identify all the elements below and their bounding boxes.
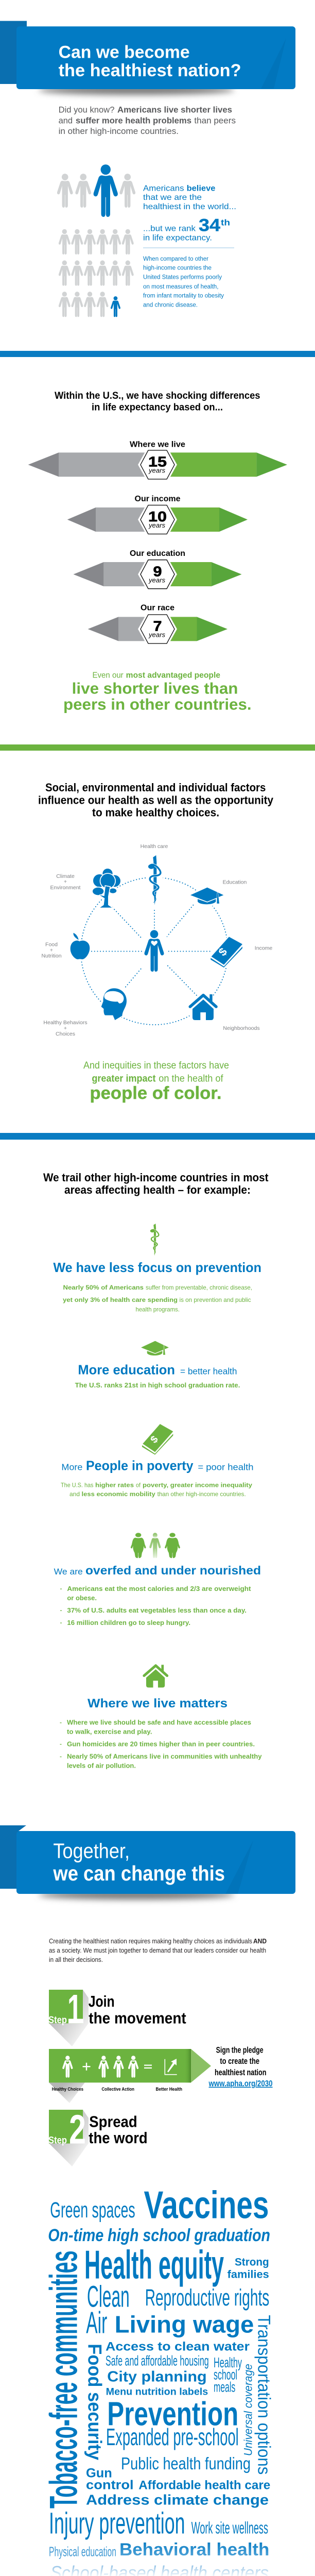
text: belief vs rank: and chronic disease. [143, 302, 198, 308]
heading [55, 390, 260, 413]
banner title: Together, [53, 1839, 130, 1863]
arrow: education 9 years: Our education [130, 549, 185, 558]
block: prevention: health programs. [136, 1306, 180, 1313]
step 1: 1 [67, 1986, 82, 2032]
callout: people of color: people of color. [90, 1083, 221, 1103]
word cloud: Behavioral health [119, 2540, 269, 2560]
factor labels: Education [223, 879, 247, 885]
word cloud: Prevention [107, 2395, 238, 2432]
text: belief vs rank: Americans [143, 184, 184, 193]
section: life expectancy differences [28, 390, 287, 714]
equation arrow: healthy choices + collective action = better health: Collective Action [102, 2087, 134, 2092]
heading: We trail other high-income countries in most [43, 1171, 269, 1184]
factor labels: Healthy Behaviors [43, 1020, 87, 1026]
block: poverty: = poor health [198, 1462, 253, 1472]
word cloud: Vaccines [144, 2183, 269, 2227]
title: Can we become [59, 42, 190, 62]
arrow: income 10 years: years [148, 522, 165, 529]
word cloud: Food security [84, 2344, 106, 2460]
word cloud: Gun [86, 2466, 112, 2480]
block: where we live: to walk, exercise and play. [67, 1728, 152, 1735]
step 1: Join [89, 1992, 115, 2010]
text: belief vs rank: that we are the [143, 193, 202, 202]
factor labels: Choices [56, 1031, 75, 1037]
block: overfed: 16 million children go to sleep hungry. [67, 1619, 190, 1626]
arrow: where we live 15 years: 15 [148, 454, 167, 470]
factor labels: + [64, 1025, 67, 1031]
paragraph: creating the healthiest nation: Creating the healthiest nation requires making healthy choices as individuals [49, 1938, 252, 1945]
heading: influence our health as well as the opportunity [38, 793, 274, 807]
factor labels: Income [255, 945, 272, 952]
block: poverty: and [69, 1490, 80, 1498]
callout: people of color: And inequities in these factors have [83, 1060, 229, 1071]
pictogram: people [57, 164, 135, 317]
block: overfed [54, 1533, 261, 1626]
word cloud: Green spaces [50, 2198, 135, 2223]
icon: green caduceus [150, 1224, 159, 1256]
call to action: sign the pledge: www.apha.org/2030 [208, 2079, 273, 2089]
arrow: education 9 years: years [148, 577, 165, 584]
word cloud: On-time high school graduation [48, 2226, 270, 2245]
callout: most advantaged: live shorter lives than [72, 680, 238, 698]
arrow: race 7 years: Our race [141, 604, 174, 612]
word cloud: Healthy [214, 2354, 242, 2370]
icon: money: $ [216, 945, 230, 959]
section: trailing other countries [43, 1171, 269, 1769]
text: belief vs rank: high-income countries the [143, 265, 212, 272]
factor labels: Environment [50, 885, 81, 891]
word cloud: Safe and affordable housing [106, 2353, 209, 2369]
intro paragraph: Did you know? [59, 105, 114, 115]
icon: apple [71, 933, 90, 959]
banner title [53, 1839, 225, 1885]
word cloud: Injury prevention [49, 2506, 185, 2540]
text: belief vs rank: on most measures of health, [143, 284, 218, 290]
word cloud: Transportation options [254, 2315, 274, 2475]
step 1: the movement [89, 2009, 186, 2027]
block: poverty: less economic mobility [81, 1490, 155, 1498]
intro paragraph [59, 105, 236, 136]
block: where we live: Nearly 50% of Americans live in communities with unhealthy [67, 1753, 262, 1760]
text: belief vs rank: United States performs poorly [143, 274, 222, 280]
block: prevention: We have less focus on prevention [53, 1260, 261, 1275]
callout: most advantaged: Even our [93, 671, 124, 680]
icon: tree [93, 869, 120, 908]
block: where we live: Where we live matters [87, 1697, 227, 1710]
word cloud: Address climate change [86, 2492, 269, 2508]
block: poverty: than other high-income countries. [157, 1490, 246, 1498]
word cloud: Living wage [115, 2311, 254, 2337]
step 2: the word [89, 2129, 148, 2147]
arrow: where we live 15 years: Where we live [130, 440, 185, 449]
paragraph: creating the healthiest nation [49, 1938, 267, 1963]
block: poverty: People in poverty [86, 1458, 194, 1473]
step 2 [48, 2106, 148, 2166]
section: intro [0, 21, 295, 317]
arrow: income 10 years [67, 495, 248, 536]
word cloud: Public health funding [121, 2454, 251, 2473]
block: prevention: Nearly 50% of Americans [63, 1284, 144, 1291]
icon: central person with heart [142, 928, 167, 973]
block: prevention: yet only 3% of health care spending [63, 1296, 178, 1303]
factor labels: Health care [141, 843, 168, 850]
step 2: Step [48, 2135, 67, 2146]
text: belief vs rank: in life expectancy. [143, 234, 212, 242]
block: education: More education [78, 1362, 175, 1377]
block: prevention: is on prevention and public [179, 1296, 251, 1303]
call to action: sign the pledge: to create the [220, 2057, 259, 2066]
arrow: race 7 years [88, 604, 227, 646]
block: poverty: higher rates [95, 1482, 134, 1489]
word cloud: City planning [107, 2369, 207, 2385]
call to action: sign the pledge: Sign the pledge [216, 2045, 264, 2055]
text: belief vs rank: ...but we rank [143, 225, 196, 233]
block: where we live [60, 1665, 262, 1769]
icon: green money [142, 1424, 173, 1455]
factor labels [41, 843, 272, 1037]
factor labels: + [50, 947, 53, 953]
block: prevention [53, 1224, 261, 1313]
step 1 [48, 1986, 186, 2046]
callout: people of color [83, 1060, 229, 1103]
text: belief vs rank: believe [187, 184, 215, 193]
icon: green house [144, 1665, 167, 1687]
word cloud: Menu nutrition labels [106, 2386, 208, 2397]
heading [38, 781, 274, 819]
arrow: income 10 years: 10 [148, 509, 167, 524]
word cloud: Tobacco-free communities [42, 2250, 85, 2509]
factor labels: Food [45, 942, 58, 948]
block: overfed: We are [54, 1567, 83, 1577]
intro paragraph: than peers [194, 116, 236, 126]
arrow: race 7 years: years [148, 632, 165, 639]
arrow: where we live 15 years [28, 440, 287, 481]
icon: green money: $ [148, 1434, 161, 1446]
block: poverty: More [61, 1462, 82, 1472]
diagram: factor wheel [41, 843, 272, 1037]
word cloud: Affordable health care [138, 2478, 270, 2493]
word cloud: Access to clean water [106, 2340, 250, 2354]
section: factors [38, 781, 274, 1103]
equation arrow: healthy choices + collective action = better health [49, 2049, 211, 2103]
paragraph: creating the healthiest nation: as a society. We must join together to demand that our leaders consider our health [49, 1947, 266, 1954]
block: poverty: of [136, 1482, 141, 1489]
header banner [0, 21, 295, 95]
heading: to make healthy choices. [92, 806, 219, 819]
callout: most advantaged: peers in other countries. [63, 696, 252, 714]
intro paragraph: and [59, 116, 73, 126]
heading: Within the U.S., we have shocking differences [55, 390, 260, 401]
equation arrow: healthy choices + collective action = better health: Healthy Choices [52, 2087, 83, 2092]
word cloud: Clean [87, 2280, 130, 2313]
block: where we live: Where we live should be safe and have accessible places [67, 1719, 251, 1726]
paragraph: creating the healthiest nation: in all their decisions. [49, 1956, 103, 1963]
word cloud: families [227, 2268, 269, 2281]
word cloud: Physical education [49, 2544, 116, 2559]
block: overfed: overfed and under nourished [85, 1564, 261, 1577]
text: belief vs rank [143, 184, 236, 308]
arrow: income 10 years: Our income [135, 495, 181, 503]
block: education: = better health [180, 1366, 237, 1376]
word cloud: Universal coverage [241, 2364, 254, 2456]
factor labels: Nutrition [41, 953, 62, 959]
step 2: Spread [89, 2112, 137, 2130]
header banner: together [0, 1825, 295, 1900]
block: education: The U.S. ranks 21st in high school graduation rate. [75, 1382, 240, 1389]
icon: three figures [131, 1533, 180, 1558]
icon: money [208, 935, 244, 970]
arrow: education 9 years [73, 549, 242, 591]
block: overfed: or obese. [67, 1595, 97, 1602]
banner title: we can change this [53, 1861, 225, 1885]
block: education [75, 1341, 240, 1389]
text: belief vs rank: healthiest in the world... [143, 202, 236, 211]
word cloud: control [86, 2478, 134, 2493]
arrow: race 7 years: 7 [153, 618, 162, 634]
block: poverty: The U.S. has [61, 1482, 94, 1489]
callout: people of color: greater impact [92, 1074, 156, 1084]
intro paragraph: suffer more health problems [76, 116, 191, 126]
call to action: sign the pledge [208, 2045, 273, 2089]
icon: head with brain [101, 988, 127, 1020]
icon: caduceus [147, 855, 163, 906]
block: poverty: poverty, greater income inequality [143, 1482, 252, 1489]
icon: graduation cap [189, 886, 225, 906]
heading [43, 1171, 269, 1196]
block: where we live: Gun homicides are 20 times higher than in peer countries. [67, 1740, 255, 1748]
word cloud: Strong [235, 2256, 269, 2268]
text: belief vs rank: When compared to other [143, 256, 208, 262]
step 1: Step [48, 2015, 67, 2026]
call to action: sign the pledge: healthiest nation [215, 2068, 267, 2077]
intro paragraph: in other high-income countries. [59, 126, 179, 136]
block: poverty [61, 1424, 253, 1498]
step 2: 2 [69, 2106, 86, 2153]
text: belief vs rank: from infant mortality to obesity [143, 293, 224, 299]
word cloud: school [214, 2366, 237, 2382]
callout: most advantaged [63, 671, 252, 714]
arrow: where we live 15 years: years [148, 467, 165, 474]
factor labels: Climate [56, 873, 75, 879]
factor labels: + [64, 879, 67, 885]
icon: house [187, 992, 220, 1022]
title: the healthiest nation? [59, 61, 241, 80]
title [59, 42, 241, 80]
word cloud [42, 2183, 274, 2576]
heading: in life expectancy based on... [92, 402, 223, 413]
callout: people of color: on the health of [159, 1074, 223, 1084]
heading: Social, environmental and individual factors [45, 781, 266, 794]
heading: areas affecting health – for example: [64, 1183, 251, 1196]
text: belief vs rank: th [221, 217, 230, 228]
callout: most advantaged: most advantaged people [126, 671, 220, 680]
block: where we live: levels of air pollution. [67, 1762, 136, 1769]
arrow: education 9 years: 9 [153, 563, 162, 579]
icon: green cap [141, 1341, 169, 1355]
intro paragraph: Americans live shorter lives [117, 105, 232, 115]
block: overfed: 37% of U.S. adults eat vegetables less than once a day. [67, 1607, 247, 1614]
word cloud: meals [214, 2379, 235, 2395]
paragraph: creating the healthiest nation: AND [253, 1938, 267, 1945]
factor labels: Neighborhoods [223, 1025, 260, 1031]
section: together [0, 1825, 295, 2166]
block: overfed: Americans eat the most calories and 2/3 are overweight [67, 1585, 251, 1592]
text: belief vs rank: 34 [199, 216, 220, 235]
block: prevention: suffer from preventable, chronic disease, [146, 1284, 252, 1291]
word cloud: Air [86, 2306, 107, 2340]
equation arrow: healthy choices + collective action = better health: Better Health [155, 2087, 182, 2092]
